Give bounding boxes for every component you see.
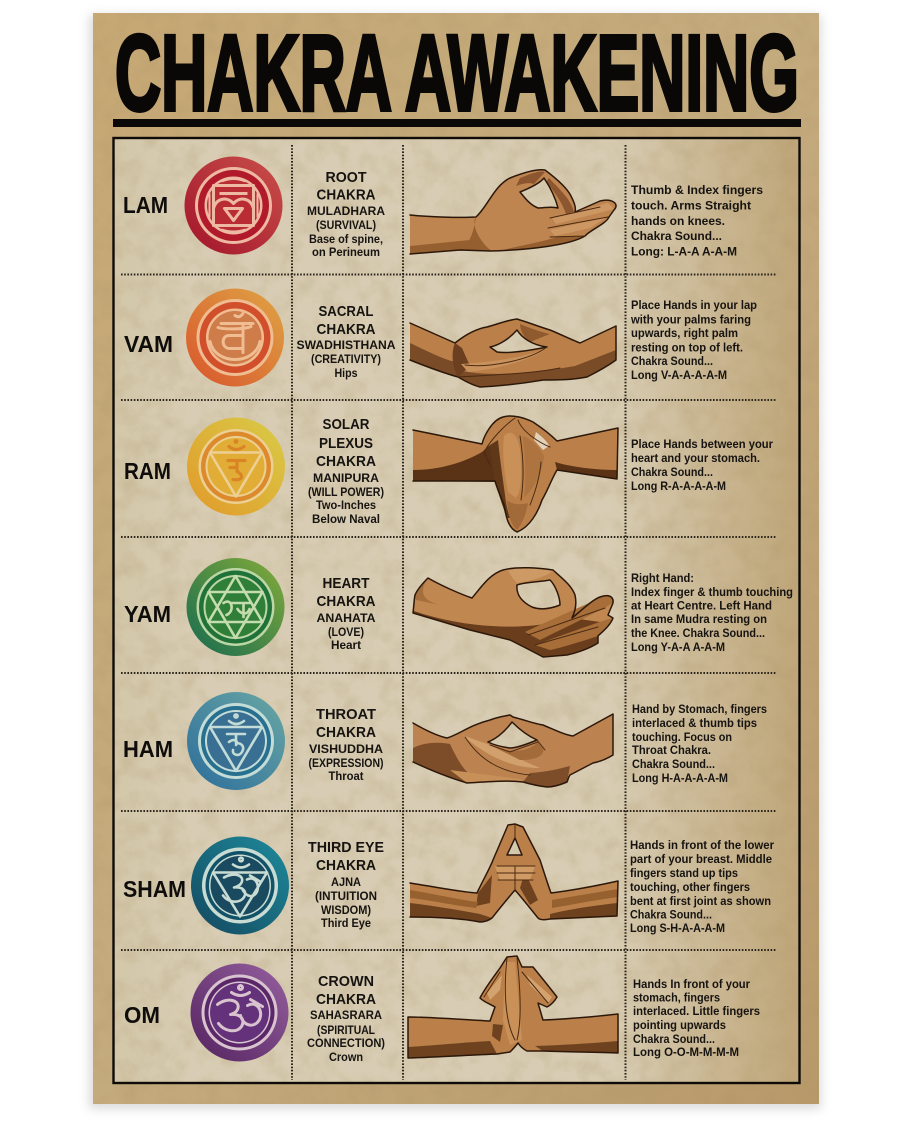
chakra name: ANAHATA xyxy=(316,611,376,625)
chakra name: CHAKRA xyxy=(316,858,376,874)
instructions: Long H-A-A-A-A-M xyxy=(632,771,728,785)
instructions: with your palms faring xyxy=(630,312,751,326)
chakra name: (CREATIVITY) xyxy=(311,352,381,366)
chakra name xyxy=(307,170,385,259)
chakra name: SOLAR xyxy=(322,417,370,433)
hand gesture xyxy=(410,170,616,254)
instructions xyxy=(631,571,793,654)
instructions: touching, other fingers xyxy=(630,880,750,894)
instructions: Long O-O-M-M-M-M xyxy=(633,1045,739,1059)
instructions: resting on top of left. xyxy=(631,340,743,354)
chakra name: THROAT xyxy=(316,707,376,723)
mantra: YAM: YAM xyxy=(124,601,171,627)
chakra name: Crown xyxy=(329,1050,363,1064)
instructions: Long Y-A-A A-A-M xyxy=(631,640,725,654)
chakra name: Third Eye xyxy=(321,916,371,930)
instructions: heart and your stomach. xyxy=(631,451,760,465)
chakra name: (EXPRESSION) xyxy=(308,756,384,770)
poster background xyxy=(89,13,821,1109)
chakra name: HEART xyxy=(322,576,370,592)
instructions: bent at first joint as shown xyxy=(630,894,771,908)
mantra: HAM: HAM xyxy=(123,736,173,762)
icon: solar plexus chakra symbol xyxy=(187,418,285,516)
instructions: upwards, right palm xyxy=(631,326,738,340)
chakra name: SACRAL xyxy=(318,304,374,320)
instructions xyxy=(630,298,757,382)
hand gesture xyxy=(413,568,613,657)
chakra name xyxy=(316,576,376,652)
mantra: OM: OM xyxy=(124,1002,160,1028)
instructions: at Heart Centre. Left Hand xyxy=(631,598,772,612)
instructions: interlaced. Little fingers xyxy=(633,1004,760,1018)
chakra name: MULADHARA xyxy=(307,204,385,218)
instructions: touching. Focus on xyxy=(632,730,732,744)
instructions: Chakra Sound... xyxy=(633,1032,715,1046)
instructions: Chakra Sound... xyxy=(632,757,715,771)
instructions: Chakra Sound... xyxy=(631,229,722,243)
chakra name: SAHASRARA xyxy=(310,1008,382,1022)
icon: third eye chakra symbol xyxy=(191,836,289,934)
mantra: RAM: RAM xyxy=(124,458,171,484)
chakra name xyxy=(308,840,384,930)
row 4: heart chakra xyxy=(124,558,793,657)
chakra name: CROWN xyxy=(318,974,374,990)
instructions: Long S-H-A-A-A-M xyxy=(630,921,725,935)
icon: sacral chakra symbol xyxy=(186,288,284,386)
chakra name: (SURVIVAL) xyxy=(316,218,376,232)
row 3: solar plexus chakra xyxy=(124,416,773,532)
mantra: LAM: LAM xyxy=(123,192,168,218)
instructions: interlaced & thumb tips xyxy=(632,716,757,730)
instructions: Long R-A-A-A-A-M xyxy=(631,479,726,493)
instructions: hands on knees. xyxy=(631,214,725,228)
title rule xyxy=(113,119,801,127)
instructions xyxy=(633,977,760,1059)
instructions: Hands in front of the lower xyxy=(630,838,774,852)
instructions: Chakra Sound... xyxy=(631,465,713,479)
chakra name: (LOVE) xyxy=(328,625,364,639)
chakra name: PLEXUS xyxy=(319,436,373,452)
icon: crown chakra symbol xyxy=(190,964,288,1062)
instructions: fingers stand up tips xyxy=(630,866,738,880)
mantra: VAM: VAM xyxy=(124,331,173,357)
chakra name: AJNA xyxy=(331,875,361,889)
chakra name: WISDOM) xyxy=(321,903,371,917)
chakra name: CHAKRA xyxy=(316,454,376,470)
chakra name: MANIPURA xyxy=(313,471,379,485)
chakra name: (INTUITION xyxy=(315,889,377,903)
chakra name: ROOT xyxy=(326,170,366,186)
chakra name: CONNECTION) xyxy=(307,1036,385,1050)
chakra name: CHAKRA xyxy=(316,992,376,1008)
instructions: part of your breast. Middle xyxy=(630,852,772,866)
instructions: Place Hands between your xyxy=(631,437,773,451)
chakra name: (WILL POWER) xyxy=(308,485,384,499)
icon: root chakra symbol xyxy=(184,156,282,254)
chakra name xyxy=(308,707,384,783)
chakra name: SWADHISTHANA xyxy=(296,338,396,352)
instructions: Chakra Sound... xyxy=(631,354,713,368)
chakra name: Base of spine, xyxy=(309,232,383,246)
instructions xyxy=(630,838,774,935)
instructions: Thumb & Index fingers xyxy=(631,183,763,197)
chakra name: CHAKRA xyxy=(316,188,376,204)
instructions: Hand by Stomach, fingers xyxy=(632,702,767,716)
chakra name xyxy=(296,304,396,380)
chakra name xyxy=(308,417,384,526)
chakra name: VISHUDDHA xyxy=(309,742,383,756)
chakra name: Two-Inches xyxy=(316,498,376,512)
hand gesture xyxy=(408,956,618,1058)
chakra name: on Perineum xyxy=(312,245,380,259)
instructions: touch. Arms Straight xyxy=(631,198,751,212)
row 1: root chakra xyxy=(123,156,763,259)
table frame and dotted grid xyxy=(114,138,800,1083)
instructions: stomach, fingers xyxy=(633,990,720,1004)
instructions: pointing upwards xyxy=(633,1018,726,1032)
row 6: third eye chakra xyxy=(123,824,774,935)
instructions: Place Hands in your lap xyxy=(631,298,757,312)
chakra name: CHAKRA xyxy=(316,322,376,338)
chakra name: CHAKRA xyxy=(316,725,376,741)
chakra name: Below Naval xyxy=(312,512,380,526)
instructions: Index finger & thumb touching xyxy=(631,585,793,599)
hand gesture xyxy=(410,824,618,922)
instructions: the Knee. Chakra Sound... xyxy=(631,626,765,640)
chakra name: Hips xyxy=(334,366,358,380)
row 7: crown chakra xyxy=(124,956,760,1064)
instructions: Long V-A-A-A-A-M xyxy=(631,368,727,382)
chakra name: Heart xyxy=(331,638,361,652)
chakra name: CHAKRA xyxy=(316,594,376,610)
instructions: In same Mudra resting on xyxy=(631,612,767,626)
hand gesture xyxy=(410,319,616,387)
instructions: Chakra Sound... xyxy=(630,908,712,922)
chakra name xyxy=(307,974,385,1064)
icon: heart chakra symbol xyxy=(186,558,284,656)
instructions: Hands In front of your xyxy=(633,977,750,991)
instructions: Long: L-A-A A-A-M xyxy=(631,244,737,258)
instructions xyxy=(632,702,767,785)
chakra name: Throat xyxy=(328,769,364,783)
instructions xyxy=(631,437,773,493)
mantra: SHAM: SHAM xyxy=(123,876,186,902)
row 5: throat chakra xyxy=(123,692,767,790)
icon: throat chakra symbol xyxy=(187,692,285,790)
instructions xyxy=(631,183,763,258)
chakra name: THIRD EYE xyxy=(308,840,384,856)
instructions: Right Hand: xyxy=(631,571,694,585)
chakra name: (SPIRITUAL xyxy=(317,1023,375,1037)
row 2: sacral chakra xyxy=(124,288,757,387)
hand gesture xyxy=(413,416,618,532)
hand gesture xyxy=(413,714,613,787)
instructions: Throat Chakra. xyxy=(632,743,711,757)
